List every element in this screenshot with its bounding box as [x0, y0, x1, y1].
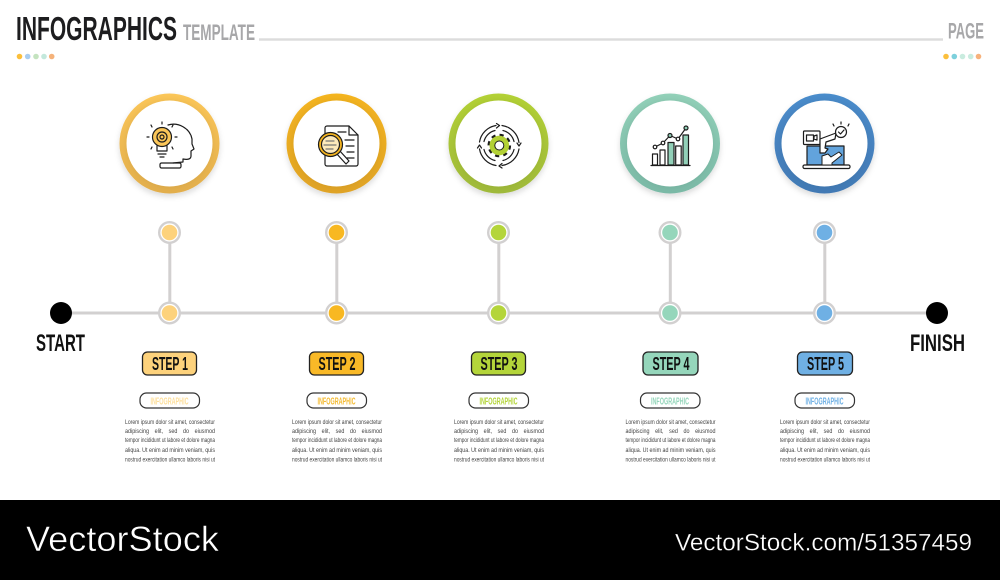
step 5: [774, 94, 874, 464]
icon circle 2: [286, 94, 386, 194]
connector 1: [168, 233, 171, 313]
lower node 4: [660, 303, 680, 323]
pill 5: [795, 393, 854, 408]
lower node 3: [488, 303, 509, 323]
body text 5: tempor incididunt ut labore et dolore magna: [780, 437, 870, 444]
connector 5: [823, 233, 826, 313]
body text 3: tempor incididunt ut labore et dolore magna: [454, 437, 544, 444]
upper node 3: [488, 222, 509, 243]
body text 1: tempor incididunt ut labore et dolore magna: [125, 437, 215, 444]
step label 2: [310, 352, 364, 375]
icon: laptop presenter: [803, 122, 850, 168]
icon circle 3: [448, 94, 548, 194]
step label 3: STEP 3: [480, 354, 518, 374]
lower node 1: [159, 303, 180, 323]
start marker: [36, 302, 85, 357]
step label 2: STEP 2: [318, 354, 356, 374]
lower node 5: [814, 303, 835, 323]
step label 1: [142, 352, 196, 375]
body text 3: Lorem ipsum dolor sit amet, consectetur: [454, 419, 545, 426]
left colour dots: [17, 54, 54, 59]
start marker: START: [36, 330, 85, 357]
upper node 4: [660, 222, 680, 243]
upper node 1: [159, 222, 180, 243]
step 4: [620, 94, 720, 464]
footer logo: VectorStock: [26, 520, 220, 559]
subtitle: TEMPLATE: [183, 20, 255, 45]
body text 2: tempor incididunt ut labore et dolore magna: [292, 437, 382, 444]
body text 4: aliqua. Ut enim ad minim veniam, quis: [626, 447, 716, 454]
header: [16, 10, 984, 59]
body text 3: nostrud exercitation ullamco laboris nisi ut: [454, 456, 544, 464]
icon: head with lightbulb: [147, 122, 194, 168]
step label 1: STEP 1: [152, 354, 188, 374]
body text 2: aliqua. Ut enim ad minim veniam, quis: [292, 447, 383, 454]
body text 2: nostrud exercitation ullamco laboris nisi ut: [292, 456, 382, 464]
body text 4: tempor incididunt ut labore et dolore magna: [626, 437, 716, 444]
body text 1: nostrud exercitation ullamco laboris nisi ut: [125, 456, 215, 464]
pill 1: INFOGRAPHIC: [150, 396, 188, 407]
step label 5: [798, 352, 852, 375]
pill 3: INFOGRAPHIC: [480, 396, 518, 407]
lower node 2: [326, 303, 347, 323]
footer url: VectorStock.com/51357459: [675, 530, 972, 556]
icon circle 1: [120, 94, 220, 194]
icon: document with magnifier: [318, 126, 358, 166]
pill 5: INFOGRAPHIC: [806, 396, 844, 407]
finish marker: FINISH: [910, 330, 965, 357]
pill 1: [140, 393, 200, 408]
body text 1: Lorem ipsum dolor sit amet, consectetur: [125, 419, 216, 426]
connector 3: [497, 233, 500, 313]
upper node 2: [326, 222, 347, 243]
body text 5: nostrud exercitation ullamco laboris nisi ut: [780, 456, 870, 464]
body text 4: Lorem ipsum dolor sit amet, consectetur: [626, 419, 716, 426]
pill 4: [640, 393, 700, 408]
icon circle 5: [774, 94, 874, 194]
body text 2: [292, 419, 383, 464]
step label 4: [643, 352, 698, 375]
body text 5: adipiscing elit, sed do eiusmod: [780, 428, 870, 435]
body text 3: adipiscing elit, sed do eiusmod: [454, 428, 544, 435]
icon circle 4: [620, 94, 720, 194]
body text 1: [125, 419, 216, 464]
body text 1: adipiscing elit, sed do eiusmod: [125, 428, 215, 435]
body text 2: Lorem ipsum dolor sit amet, consectetur: [292, 419, 383, 426]
step label 3: [472, 352, 526, 375]
body text 3: aliqua. Ut enim ad minim veniam, quis: [454, 447, 545, 454]
body text 2: adipiscing elit, sed do eiusmod: [292, 428, 382, 435]
body text 3: [454, 419, 545, 464]
body text 4: nostrud exercitation ullamco laboris nisi ut: [626, 456, 716, 464]
step label 5: STEP 5: [807, 354, 844, 374]
step 1: [120, 94, 220, 464]
connector 2: [335, 233, 338, 313]
step 2: [286, 94, 386, 464]
timeline: [36, 302, 965, 357]
body text 1: aliqua. Ut enim ad minim veniam, quis: [125, 447, 216, 454]
connector 4: [669, 233, 672, 313]
header rule: [259, 38, 943, 41]
upper node 5: [814, 222, 835, 243]
body text 5: aliqua. Ut enim ad minim veniam, quis: [780, 447, 871, 454]
step label 4: STEP 4: [652, 354, 690, 374]
body text 4: [626, 419, 716, 464]
right colour dots: [943, 54, 981, 59]
pill 3: [469, 393, 528, 408]
body text 5: Lorem ipsum dolor sit amet, consectetur: [780, 419, 871, 426]
icon: gear with cycle arrows: [478, 124, 521, 168]
step 3: [448, 94, 548, 464]
footer banner: [0, 500, 1000, 580]
title: INFOGRAPHICS: [16, 10, 177, 47]
pill 2: INFOGRAPHIC: [318, 396, 356, 407]
pill 2: [307, 393, 366, 408]
icon: rising bar chart: [651, 126, 690, 166]
body text 4: adipiscing elit, sed do eiusmod: [626, 428, 716, 435]
pill 4: INFOGRAPHIC: [651, 396, 689, 407]
finish marker: [910, 302, 965, 357]
body text 5: [780, 419, 871, 464]
